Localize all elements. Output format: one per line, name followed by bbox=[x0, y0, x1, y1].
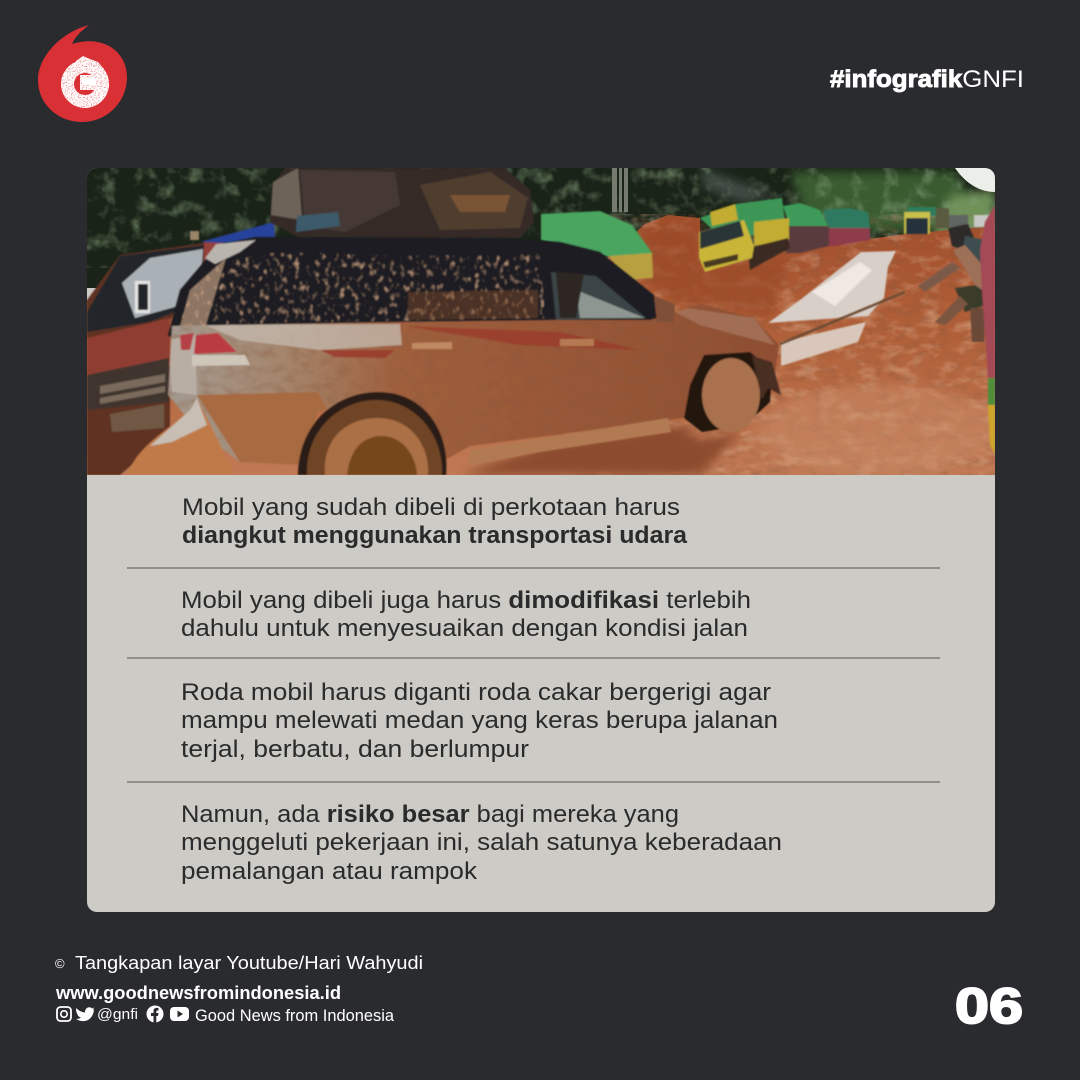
photo: red truck on the left bbox=[87, 222, 275, 475]
logo: GNFI red six with eagle emblem bbox=[38, 25, 127, 122]
item 1: airlift: diangkut menggunakan transportasi udara bbox=[182, 522, 687, 549]
social media row bbox=[57, 1006, 395, 1025]
photo credit: © bbox=[55, 956, 65, 971]
item 1: airlift bbox=[182, 494, 687, 549]
photo: far vehicles bbox=[949, 215, 968, 227]
photo: workers pulling the tow rope bbox=[780, 205, 995, 455]
website url: www.goodnewsfromindonesia.id bbox=[55, 982, 341, 1003]
photo: front wheel bbox=[684, 352, 772, 432]
item 3: claw tyres bbox=[181, 679, 778, 763]
item 4: risk: pemalangan atau rampok bbox=[181, 858, 478, 885]
item 3: claw tyres: mampu melewati medan yang keras berupa jalanan bbox=[181, 707, 778, 734]
icon: facebook bbox=[146, 1006, 164, 1023]
item 3: claw tyres: Roda mobil harus diganti roda cakar bergerigi agar bbox=[181, 679, 771, 706]
photo: SUV roof and windows bbox=[168, 237, 664, 338]
photo: green tarp truck bbox=[541, 211, 653, 257]
photo: SUV running board bbox=[468, 418, 671, 466]
hashtag: infografikGNFI: #infografik GNFI bbox=[830, 66, 1024, 93]
photo: SUV door handles bbox=[412, 342, 452, 349]
handle: @gnfi bbox=[97, 1006, 138, 1023]
icon: youtube bbox=[170, 1007, 189, 1021]
item 2: modification bbox=[181, 587, 751, 642]
item 1: airlift: Mobil yang sudah dibeli di perkotaan harus bbox=[182, 494, 680, 521]
item 4: risk: menggeluti pekerjaan ini, salah satunya keberadaan bbox=[181, 829, 782, 856]
photo: red truck bbox=[823, 208, 870, 229]
icon: instagram bbox=[57, 1007, 71, 1021]
photo: second truck bbox=[783, 203, 829, 228]
photo: SUV body panels bbox=[168, 304, 779, 465]
photo: muddy SUV bbox=[128, 237, 781, 475]
photo: white flooded strip bbox=[768, 251, 896, 366]
item 2: modification: dahulu untuk menyesuaikan dengan kondisi jalan bbox=[181, 615, 748, 642]
page name: Good News from Indonesia bbox=[195, 1006, 395, 1025]
page number: 06 bbox=[955, 978, 1023, 1034]
photo: muddy car stuck on a jungle road bbox=[87, 168, 1000, 475]
photo: forest background bbox=[87, 168, 995, 288]
photo: SUV tail lights bbox=[180, 333, 194, 350]
icon: twitter bbox=[76, 1007, 94, 1021]
photo: yellow truck bbox=[700, 198, 786, 236]
item 3: claw tyres: terjal, berbatu, dan berlumpur bbox=[181, 736, 529, 763]
item 2: modification: Mobil yang dibeli juga harus dimodifikasi terlebih bbox=[181, 587, 751, 614]
photo: luggage on the roof bbox=[270, 168, 534, 238]
item 4: risk bbox=[181, 801, 782, 885]
photo credit: Tangkapan layar Youtube/Hari Wahyudi bbox=[75, 953, 423, 973]
photo: muddy ground bbox=[87, 214, 1000, 475]
photo: mud mound at the rear bbox=[128, 398, 235, 475]
item 4: risk: Namun, ada risiko besar bagi mereka yang bbox=[181, 801, 679, 828]
panel: text card bbox=[87, 168, 995, 912]
photo: rear wheel bbox=[298, 392, 446, 475]
photo: line of trucks bbox=[541, 198, 990, 280]
